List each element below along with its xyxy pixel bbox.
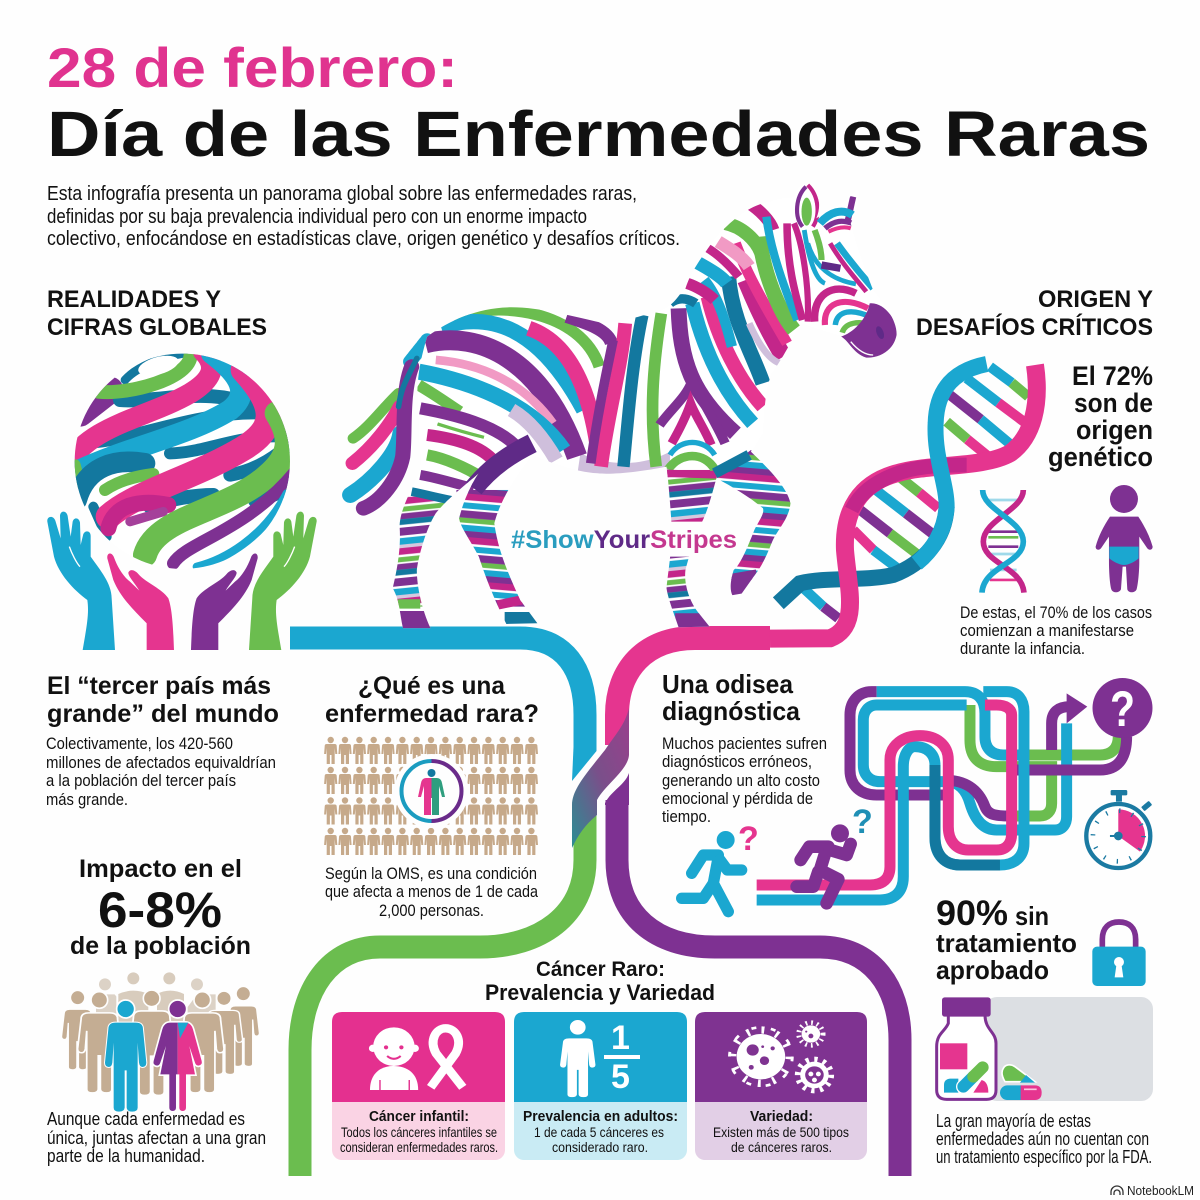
text: FDA [936, 1111, 1152, 1167]
icon: question circle: ? [1110, 681, 1135, 737]
panel: que es una enfermedad rara [324, 672, 539, 920]
hand: pink [107, 554, 174, 650]
heading: origen [916, 286, 1153, 341]
heading: origen: DESAFÍOS CRÍTICOS [916, 313, 1153, 341]
intro text [47, 183, 680, 250]
panel: tercer pais: Colectivamente, los 420-560 [46, 734, 233, 753]
intro text: colectivo, enfocándose en estadísticas clave, origen genético y desafíos críticos. [47, 228, 680, 250]
text: infancy: De estas, el 70% de los casos [960, 603, 1152, 622]
panel: odisea diagnostica: emocional y pérdida de [662, 789, 813, 808]
NotebookLM mark: NotebookLM [1127, 1183, 1194, 1198]
panel: impacto: Aunque cada enfermedad es [47, 1109, 245, 1129]
panel: que es una enfermedad rara: que afecta a menos de 1 de cada [325, 882, 538, 901]
card: cancer infantil [332, 1012, 505, 1160]
panel: 72 percent: son de [1074, 388, 1153, 418]
card: prevalencia: Prevalencia en adultos: [523, 1109, 678, 1125]
title: 28 de febrero: [47, 36, 458, 99]
maze pink path [757, 705, 1012, 885]
panel: impacto: 6-8% [98, 882, 222, 938]
card: variedad [695, 1012, 867, 1160]
panel: 90 percent [936, 894, 1077, 985]
panel: 72 percent: genético [1048, 442, 1153, 472]
icon: blue runner [682, 831, 742, 912]
panel: que es una enfermedad rara: enfermedad rara? [325, 700, 539, 728]
panel: odisea diagnostica: Muchos pacientes sufren [662, 734, 827, 753]
maze long blue path [757, 692, 1024, 900]
icon: medicine bottle and pills [937, 997, 1042, 1100]
icon: child [369, 1027, 419, 1090]
icon: padlock [1092, 922, 1146, 986]
maze arrow [1052, 693, 1087, 750]
card: variedad: Variedad: [750, 1109, 813, 1125]
zebra body stripes [393, 184, 897, 628]
panel: 90 percent: sin [1015, 901, 1049, 931]
title [47, 36, 1150, 170]
panel: odisea diagnostica: tiempo. [662, 807, 711, 826]
panel: tercer pais [46, 672, 279, 809]
maze purple outer path [850, 692, 1127, 816]
zebra leg fills [388, 497, 460, 607]
icon: blue question mark: ? [852, 803, 873, 841]
card: variedad: Existen más de 500 tipos [713, 1124, 849, 1140]
intro text: Esta infografía presenta un panorama global sobre las enfermedades raras, [47, 183, 637, 205]
panel: tercer pais: El “tercer país más [47, 672, 271, 700]
hand thumb lines [69, 547, 295, 567]
panel: cancer raro [332, 958, 867, 1160]
icon: person one in five [560, 1020, 595, 1097]
hashtag background gap [508, 522, 742, 557]
hand: purple [191, 554, 258, 650]
card: cancer infantil: Cáncer infantil: [369, 1109, 469, 1125]
panel: 72 percent: origen [1076, 415, 1153, 445]
panel: que es una enfermedad rara: Según la OMS, es una condición [325, 864, 537, 883]
card: cancer infantil: consideran enfermedades raros. [340, 1139, 498, 1155]
text: infancy: durante la infancia. [960, 639, 1085, 658]
panel: impacto: parte de la humanidad. [47, 1146, 205, 1166]
card: prevalencia: considerado raro. [552, 1139, 648, 1155]
zebra tail [350, 340, 427, 508]
people grid [324, 737, 538, 855]
crowd icon [62, 971, 259, 1112]
card: prevalencia: 5 [611, 1058, 630, 1096]
maze blue path inner [863, 705, 1067, 830]
card: prevalencia: 1 [611, 1019, 630, 1057]
panel: impacto [47, 855, 266, 1166]
icon: baby [1096, 485, 1153, 592]
card: cancer infantil: Todos los cánceres infantiles se [341, 1124, 497, 1140]
DNA rungs [800, 367, 1028, 618]
panel: tercer pais: millones de afectados equivaldrían [46, 753, 276, 772]
DNA blue strand upper [917, 364, 987, 563]
panel: 72 percent [1048, 361, 1153, 472]
icon: question circle [1092, 678, 1152, 738]
icon: purple runner [797, 824, 851, 903]
panel: que es una enfermedad rara: ¿Qué es una [358, 672, 506, 700]
DNA pink strand [770, 365, 1037, 639]
maze blue path top [877, 692, 1023, 755]
text: infancy [960, 603, 1152, 658]
panel: cancer raro: Prevalencia y Variedad [485, 980, 715, 1005]
icon: ribbon [431, 1028, 463, 1087]
zebra hooves [398, 455, 758, 621]
heading: realidades: CIFRAS GLOBALES [47, 314, 267, 341]
panel: tercer pais: más grande. [46, 790, 128, 809]
panel: 90 percent: tratamiento [936, 928, 1077, 958]
panel: impacto: de la población [70, 932, 251, 960]
woman figure [153, 1000, 202, 1111]
panel: odisea diagnostica [662, 669, 827, 826]
panel: 72 percent: El 72% [1072, 361, 1153, 391]
connecting ribbons [290, 638, 900, 1176]
heading: realidades [47, 286, 267, 341]
DNA blue strand lower [778, 507, 947, 603]
title: Día de las Enfermedades Raras [47, 98, 1150, 170]
icon: stopwatch [1086, 790, 1152, 868]
grey treatment box [985, 997, 1153, 1101]
panel: tercer pais: grande” del mundo [47, 700, 279, 728]
highlighted person in ring [394, 754, 468, 828]
panel: impacto: Impacto en el [79, 855, 242, 883]
large DNA helix [770, 364, 1037, 639]
card: prevalencia: 1 de cada 5 cánceres es [534, 1124, 664, 1140]
hand: blue [47, 512, 115, 650]
card: variedad: de cánceres raros. [731, 1139, 832, 1155]
zebra illustration [350, 180, 911, 647]
heading: origen: ORIGEN Y [1038, 286, 1153, 313]
icon: pink question mark: ? [738, 820, 759, 858]
text: infancy: comienzan a manifestarse [960, 621, 1134, 640]
zebra head stripes [794, 185, 897, 359]
heading: realidades: REALIDADES Y [47, 286, 221, 313]
maze of diagnostic paths [757, 692, 1127, 900]
panel: 90 percent: 90% [936, 894, 1008, 933]
globe held by hands [47, 352, 317, 650]
panel: cancer raro: Cáncer Raro: [536, 958, 665, 981]
panel: 90 percent: aprobado [936, 955, 1049, 985]
panel: odisea diagnostica: diagnósticos erróneos, [662, 752, 812, 771]
maze green path [970, 705, 1052, 816]
hashtag: #ShowYourStripes [511, 526, 737, 554]
icon: viruses [729, 1023, 831, 1090]
panel: que es una enfermedad rara: 2,000 personas. [379, 901, 484, 920]
globe [67, 352, 297, 569]
DNA magenta mid band [852, 465, 967, 510]
panel: odisea diagnostica: Una odisea [662, 669, 794, 699]
panel: tercer pais: a la población del tercer país [46, 771, 236, 790]
panel: odisea diagnostica: diagnóstica [662, 696, 801, 726]
panel: odisea diagnostica: generando un alto costo [662, 771, 820, 790]
text: FDA: La gran mayoría de estas [936, 1111, 1091, 1131]
card: prevalencia [514, 1012, 687, 1160]
icon: small DNA [982, 490, 1024, 593]
hand: green [249, 512, 317, 650]
intro text: definidas por su baja prevalencia individual pero con un enorme impacto [47, 206, 587, 228]
man figure [105, 1000, 146, 1112]
panel: impacto: única, juntas afectan a una gran [47, 1128, 266, 1148]
